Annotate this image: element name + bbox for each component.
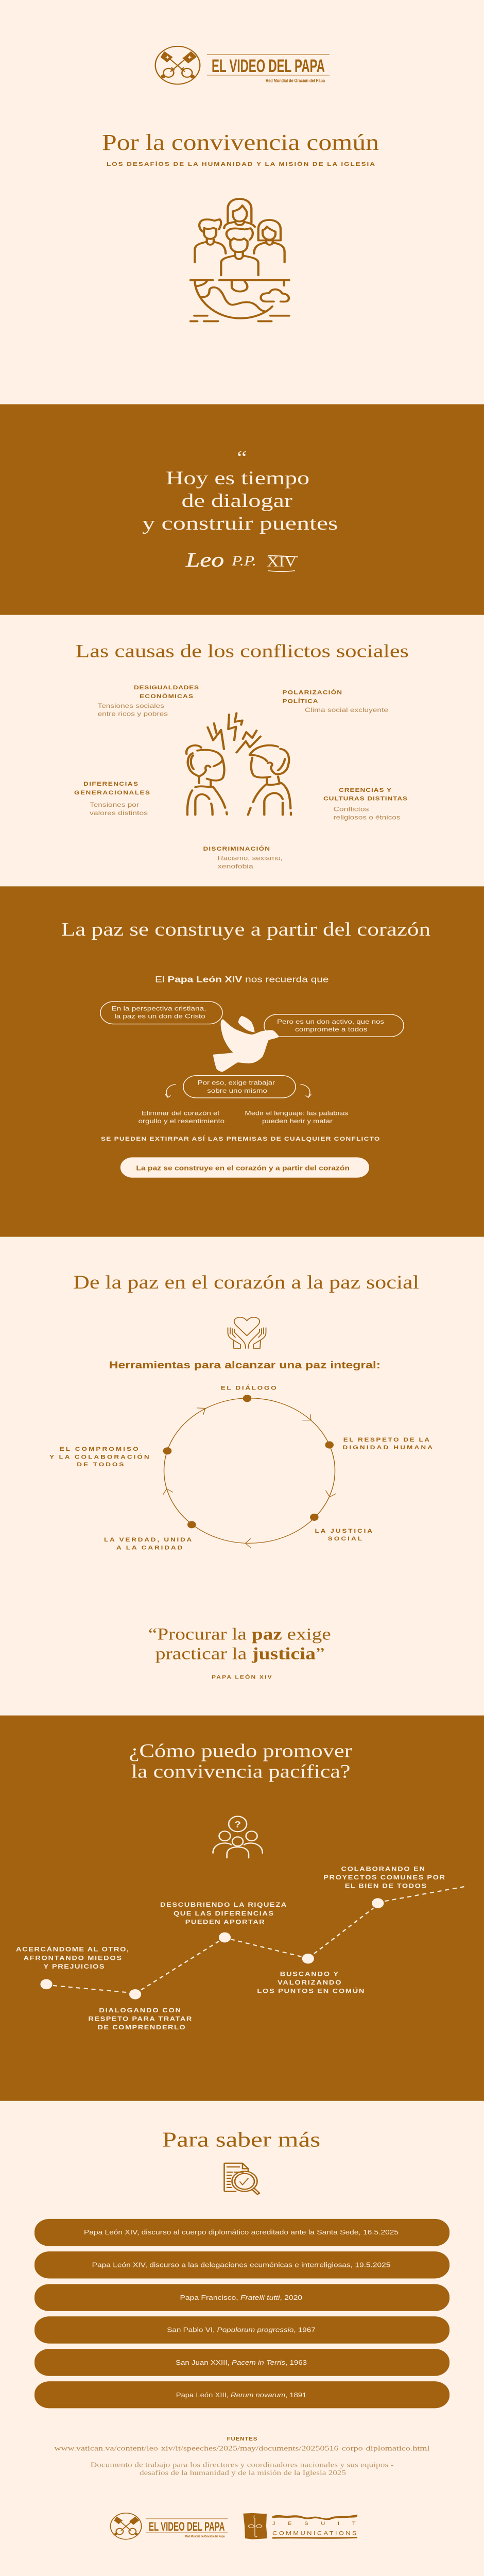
step: colaborando en proyectos: PROYECTOS COMUNES POR [323, 1874, 445, 1881]
sources: FUENTES [227, 2436, 257, 2442]
cause: creencias y culturas distintas: CULTURAS DISTINTAS [323, 795, 407, 802]
step: buscando y valorizando: BUSCANDO Y [280, 1970, 338, 1977]
quote: procurar la paz: PAPA LEÓN XIV [212, 1674, 272, 1680]
cause: diferencias generacionales: valores distintos [90, 809, 148, 817]
logo: Jesuit Communications: JESUIT [272, 2521, 356, 2527]
label: el respeto: EL RESPETO DE LA [343, 1436, 429, 1443]
pill: don activo [264, 1014, 404, 1037]
heading: Para saber más [162, 2128, 320, 2151]
label: la verdad [104, 1536, 192, 1551]
step: buscando y valorizando: LOS PUNTOS EN COMÚN [257, 1988, 364, 1994]
pill: trabajar sobre uno mismo: sobre uno mismo [207, 1087, 267, 1094]
cause: creencias y culturas distintas: Conflictos [333, 806, 369, 812]
heading: Las causas de los conflictos sociales [76, 641, 409, 662]
pill: Rerum novarum [34, 2381, 450, 2408]
icon: crossed keys [111, 2513, 142, 2539]
step: dialogando con respeto [88, 2007, 192, 2031]
logo: El Video del Papa footer [111, 2513, 228, 2539]
sources: Documento de trabajo para los directores y coordinadores nacionales y sus equipos - [91, 2461, 393, 2469]
logo: El Video del Papa: EL VIDEO DEL PAPA [212, 57, 325, 76]
icon: document with magnifier [224, 2163, 260, 2194]
cause: polarización política: Clima social excluyente [305, 706, 388, 714]
pill: don de Cristo: En la perspectiva cristiana, [111, 1005, 206, 1012]
step: acercándome al otro: ACERCÁNDOME AL OTRO, [16, 1946, 129, 1953]
sources: www.vatican.va/content/leo-xiv/it/speeches/2025/may/documents/20250516-corpo-diplomatico.html [55, 2445, 430, 2452]
pill: discurso cuerpo diplomático: Papa León XIV, discurso al cuerpo diplomático acreditado ante la Santa Sede, 16.5.2025 [84, 2229, 399, 2236]
quote mark: “ [237, 447, 247, 468]
heading: La paz se construye a partir del corazón [61, 919, 430, 940]
cause: creencias y culturas distintas [323, 787, 407, 821]
panel: quote hoy es tiempo [0, 404, 484, 615]
heading: ¿Cómo puedo promover [129, 1740, 352, 1761]
cause: desigualdades económicas: entre ricos y pobres [98, 710, 168, 717]
label: la justicia: SOCIAL [328, 1535, 362, 1542]
step: colaborando en proyectos: EL BIEN DE TODOS [345, 1883, 426, 1889]
label: el respeto: DIGNIDAD HUMANA [343, 1444, 433, 1451]
pill: Fratelli tutti [34, 2284, 450, 2311]
text: medir el lenguaje: pueden herir y matar [262, 1117, 333, 1125]
icon: hands holding heart [228, 1317, 266, 1348]
cause: discriminación: xenofobia [218, 863, 254, 870]
signature: Leo [185, 549, 224, 571]
cause: diferencias generacionales: Tensiones por [90, 801, 140, 808]
panel: peace from the heart [0, 886, 484, 1237]
cause: diferencias generacionales [74, 781, 150, 817]
icon: group with question [213, 1817, 263, 1858]
icon: dove [213, 1016, 280, 1072]
logo: El Video del Papa [155, 46, 330, 84]
pill: don activo: compromete a todos [295, 1026, 368, 1033]
step: acercándome al otro: Y PREJUICIOS [43, 1963, 105, 1970]
step: acercándome al otro [16, 1946, 129, 1970]
step: descubriendo la riqueza: PUEDEN APORTAR [185, 1919, 265, 1925]
label: el compromiso [49, 1446, 149, 1468]
quote: procurar la paz: practicar la justicia” [155, 1645, 325, 1663]
pill: don activo: Pero es un don activo, que nos [277, 1018, 385, 1025]
pill: conclusion: La paz se construye en el corazón y a partir del corazón [136, 1164, 350, 1172]
label: el respeto [343, 1436, 433, 1451]
cause: diferencias generacionales: DIFERENCIAS [83, 781, 138, 787]
dashed path with stops [40, 1886, 466, 1999]
signature: P.P. [231, 554, 256, 569]
subtitle: LOS DESAFÍOS DE LA HUMANIDAD Y LA MISIÓN DE LA IGLESIA [107, 160, 375, 167]
cause: diferencias generacionales: GENERACIONALES [74, 789, 150, 796]
panel: para saber más [0, 2101, 484, 2576]
cause: polarización política: POLARIZACIÓN [282, 689, 342, 696]
logo: El Video del Papa footer: EL VIDEO DEL PAPA [149, 2519, 225, 2533]
pill: trabajar sobre uno mismo [183, 1076, 296, 1098]
logo: El Video del Papa: Red Mundial de Oración del Papa [266, 78, 325, 83]
text: eliminar del corazón [139, 1110, 224, 1125]
quote text: de dialogar [181, 490, 292, 511]
signature [185, 549, 298, 571]
quote text: y construir puentes [142, 513, 338, 534]
pill: discurso cuerpo diplomático [34, 2219, 450, 2246]
quote: procurar la paz [148, 1625, 331, 1680]
label: el compromiso: DE TODOS [77, 1461, 124, 1468]
cause: polarización política [282, 689, 388, 714]
step: buscando y valorizando [257, 1970, 364, 1994]
label: el diálogo: EL DIÁLOGO [221, 1384, 276, 1391]
text: eliminar del corazón: Eliminar del corazón el [142, 1110, 219, 1116]
pill: don de Cristo: la paz es un don de Cristo [114, 1013, 205, 1020]
cause: creencias y culturas distintas: religiosos o étnicos [333, 814, 401, 821]
panel: from heart peace to social peace [0, 1237, 484, 1716]
title: Por la convivencia común [102, 130, 379, 155]
step: colaborando en proyectos [323, 1865, 445, 1889]
step: dialogando con respeto: DIALOGANDO CON [99, 2007, 181, 2014]
icon: group with question: ? [234, 1819, 241, 1829]
label: la verdad: LA VERDAD, UNIDA [104, 1536, 192, 1543]
icon: crossed keys [155, 46, 200, 84]
label: la verdad: A LA CARIDAD [116, 1544, 182, 1551]
label: la justicia [315, 1528, 372, 1542]
intro line: El Papa León XIV nos recuerda que [155, 974, 329, 984]
arrow: right [301, 1084, 311, 1097]
panel: causes of social conflicts [0, 615, 484, 886]
step: descubriendo la riqueza: DESCUBRIENDO LA RIQUEZA [160, 1901, 287, 1908]
heading: la convivencia pacífica? [131, 1761, 351, 1782]
pill: Pacem in Terris [34, 2349, 450, 2376]
pill: don de Cristo [100, 1002, 222, 1024]
pill: Populorum progressio: San Pablo VI, Populorum progressio, 1967 [167, 2327, 316, 2334]
pill: trabajar sobre uno mismo: Por eso, exige trabajar [198, 1079, 275, 1086]
pill: conclusion [120, 1157, 369, 1178]
quote: procurar la paz: “Procurar la paz exige [148, 1625, 331, 1643]
label: el compromiso: EL COMPROMISO [60, 1446, 139, 1452]
logo: Jesuit Communications [243, 2513, 357, 2539]
signature: XIV [267, 554, 297, 570]
step: buscando y valorizando: VALORIZANDO [278, 1979, 341, 1986]
pill: discurso delegaciones [34, 2251, 450, 2278]
panel: cover [0, 0, 484, 404]
pill: discurso delegaciones: Papa León XIV, discurso a las delegaciones ecuménicas e interreligiosas, 19.5.2025 [92, 2262, 390, 2269]
text: eliminar del corazón: orgullo y el resentimiento [139, 1117, 224, 1125]
cycle diagram [49, 1384, 433, 1551]
step: colaborando en proyectos: COLABORANDO EN [341, 1865, 425, 1872]
step: acercándome al otro: AFRONTANDO MIEDOS [24, 1954, 122, 1961]
reference pills [34, 2219, 450, 2408]
cause: discriminación: DISCRIMINACIÓN [203, 845, 270, 852]
text: medir el lenguaje: Medir el lenguaje: las palabras [245, 1110, 349, 1116]
logo: Jesuit Communications: COMMUNICATIONS [272, 2530, 357, 2536]
cause: discriminación [203, 845, 283, 870]
subheading: Herramientas para alcanzar una paz integral: [109, 1359, 381, 1370]
cause: desigualdades económicas: DESIGUALDADES [134, 684, 199, 691]
text: medir el lenguaje [245, 1110, 349, 1125]
quote text: Hoy es tiempo [166, 467, 309, 488]
cause: desigualdades económicas: ECONÓMICAS [140, 692, 193, 700]
icon: people over the world [191, 199, 289, 321]
heading [129, 1740, 352, 1782]
cause: desigualdades económicas: Tensiones sociales [98, 702, 165, 709]
panel: how can I promote peaceful coexistence [0, 1716, 484, 2101]
pill: Populorum progressio [34, 2316, 450, 2344]
statement: SE PUEDEN EXTIRPAR ASÍ LAS PREMISAS DE CUALQUIER CONFLICTO [101, 1135, 380, 1142]
label: la justicia: LA JUSTICIA [315, 1528, 372, 1534]
pill: Rerum novarum: Papa León XIII, Rerum novarum, 1891 [176, 2392, 306, 2399]
step: descubriendo la riqueza: QUE LAS DIFERENCIAS [174, 1910, 273, 1917]
step: dialogando con respeto: DE COMPRENDERLO [98, 2024, 185, 2031]
sources [55, 2436, 430, 2477]
step: descubriendo la riqueza [160, 1901, 287, 1925]
pill: Pacem in Terris: San Juan XXIII, Pacem in Terris, 1963 [176, 2359, 307, 2367]
cause: creencias y culturas distintas: CREENCIAS Y [339, 787, 392, 793]
step: dialogando con respeto: RESPETO PARA TRATAR [88, 2015, 192, 2022]
label: el compromiso: Y LA COLABORACIÓN [49, 1453, 149, 1460]
cause: desigualdades económicas [98, 684, 199, 717]
pill: Fratelli tutti: Papa Francisco, Fratelli tutti, 2020 [180, 2294, 302, 2302]
quote text [142, 467, 338, 534]
icon: two people arguing [186, 713, 291, 815]
cause: polarización política: POLÍTICA [282, 697, 318, 704]
cause: discriminación: Racismo, sexismo, [218, 855, 283, 861]
logo: El Video del Papa footer: Red Mundial de Oración del Papa [185, 2535, 225, 2538]
heading: De la paz en el corazón a la paz social [73, 1272, 419, 1293]
arrow: left [165, 1084, 176, 1097]
sources: desafíos de la humanidad y de la misión de la Iglesia 2025 [140, 2469, 346, 2477]
